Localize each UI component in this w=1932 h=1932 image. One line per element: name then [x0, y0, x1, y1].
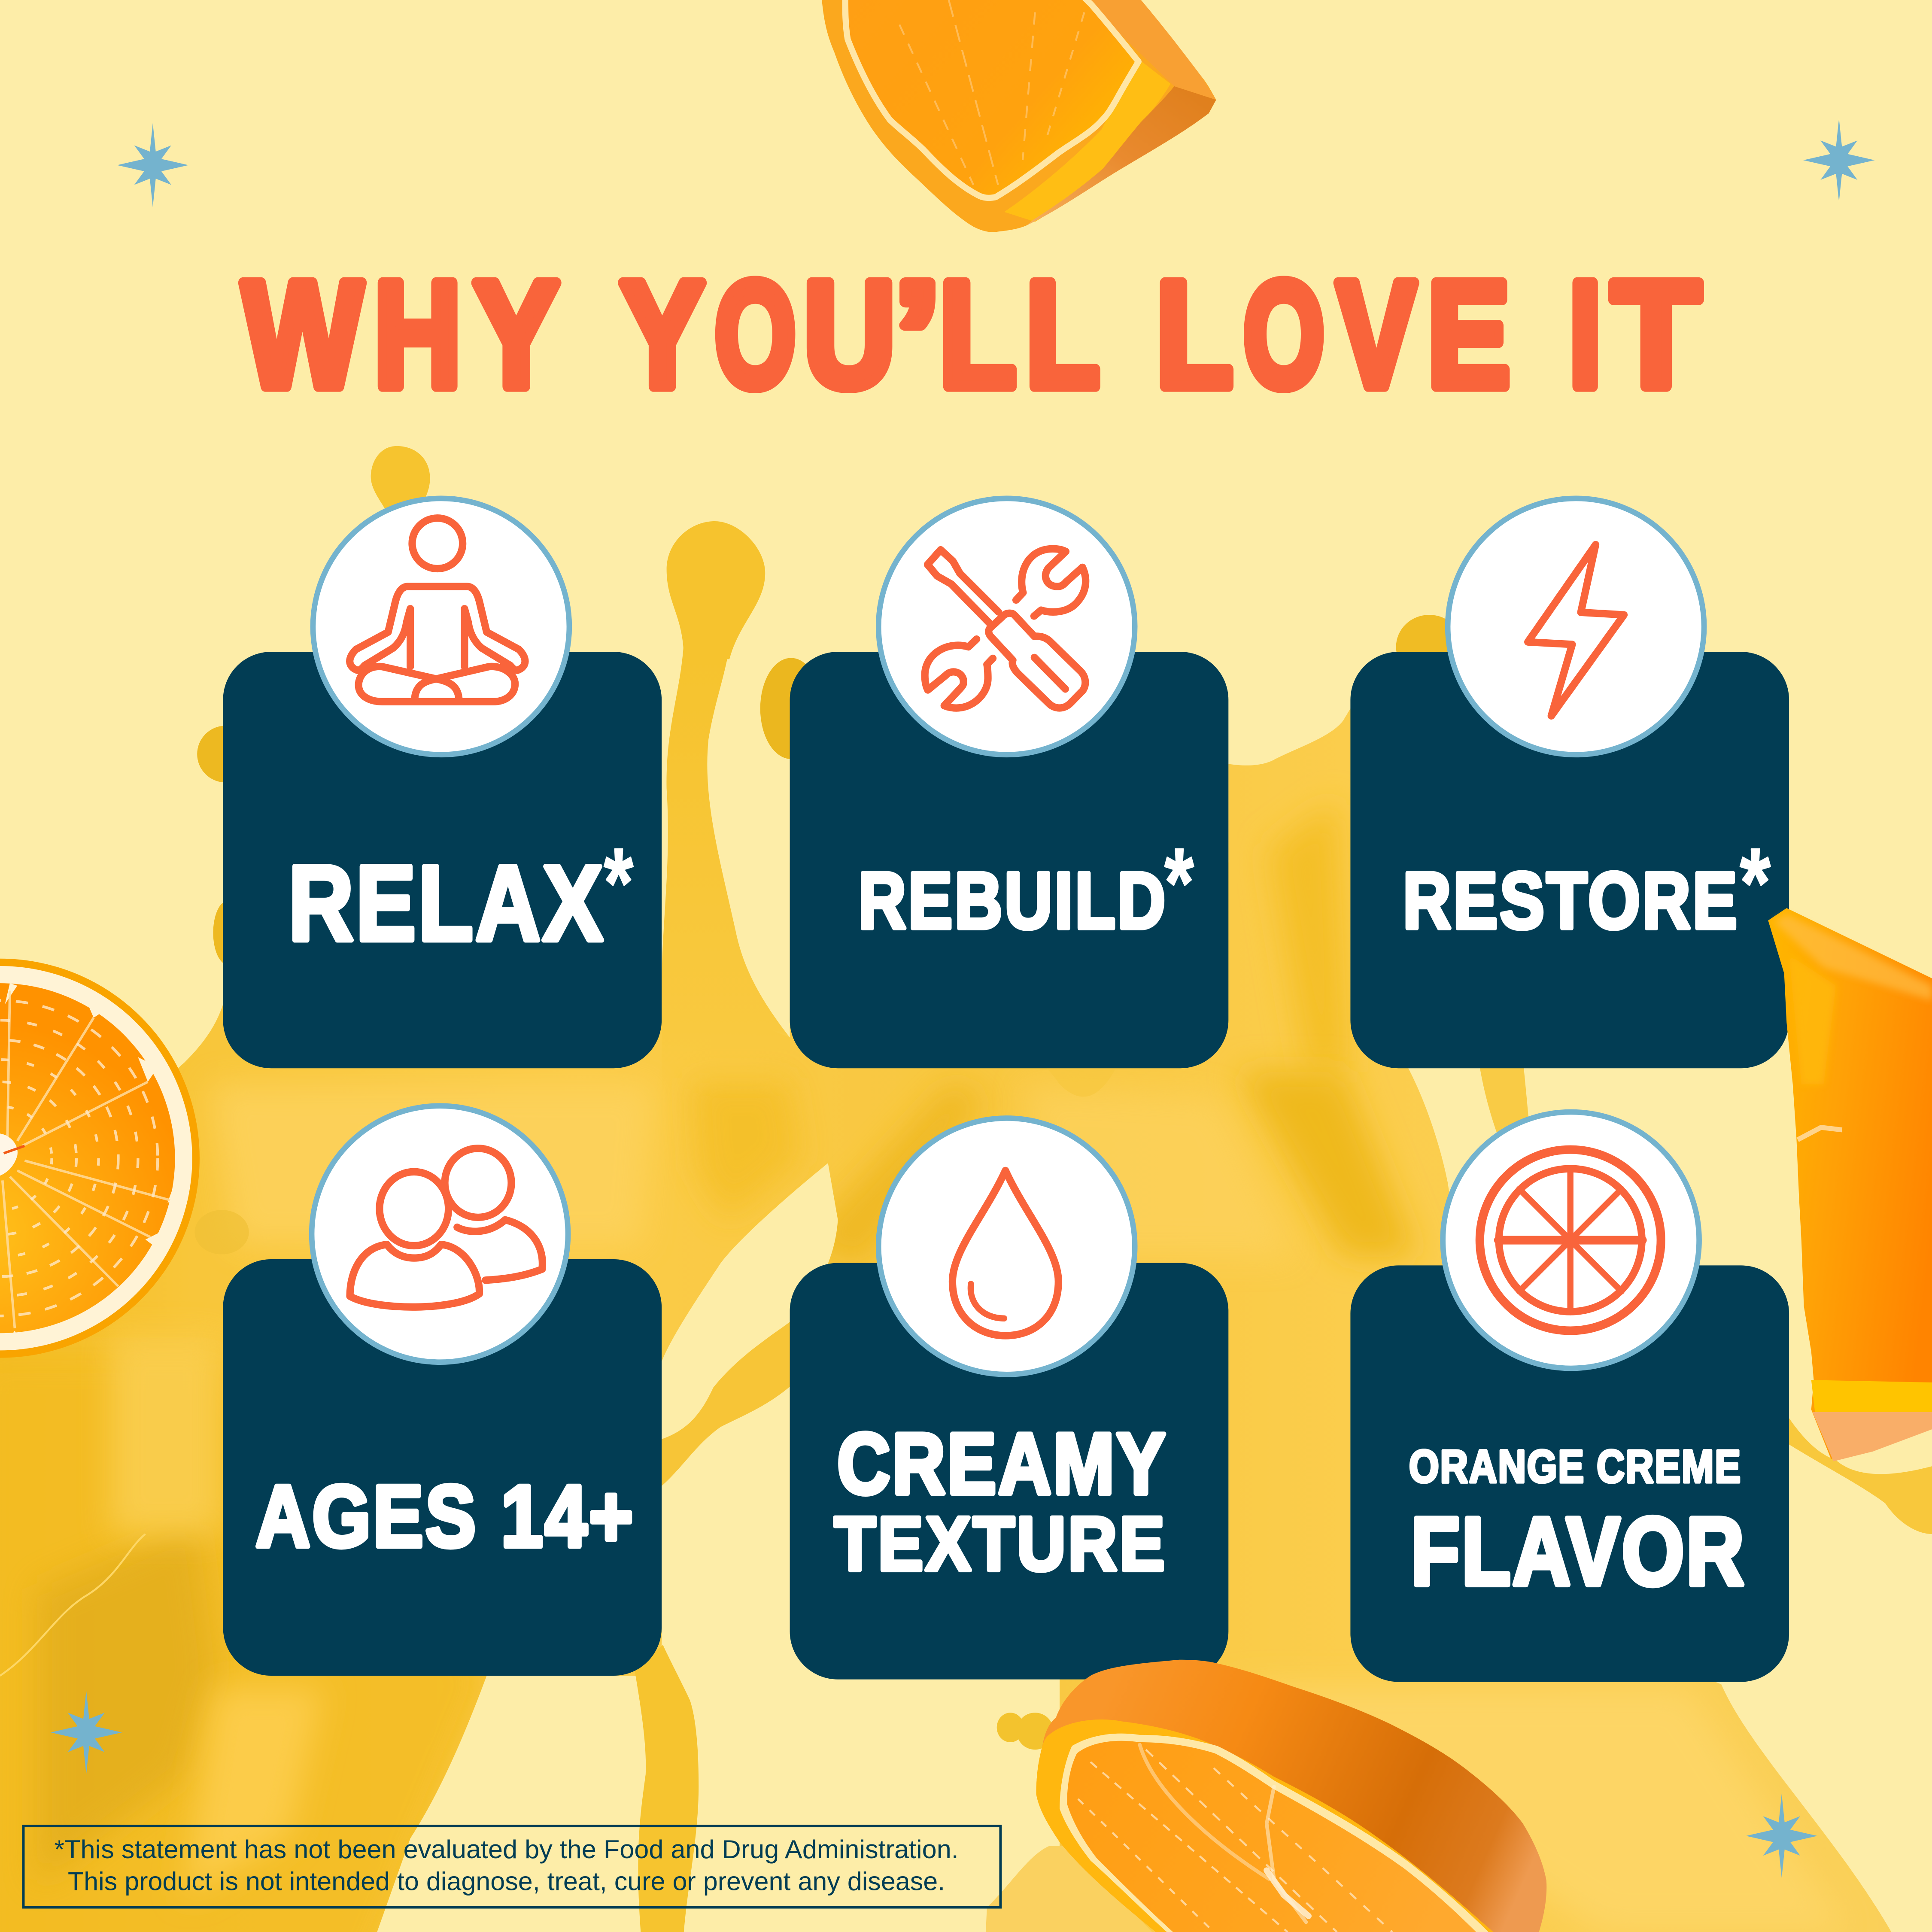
label: ages 14+: AGES 14+: [256, 1468, 635, 1565]
star: bottom right: [1746, 1794, 1817, 1878]
label: creamy texture: TEXTURE: [834, 1501, 1167, 1586]
column below ages card: [635, 1645, 699, 1932]
icon: meditation: [313, 498, 569, 755]
card: relax: [223, 652, 662, 1068]
label: orange creme flavor: ORANGE CREME: [1409, 1440, 1742, 1492]
star: bottom left: [51, 1691, 122, 1774]
label: restore: RESTORE: [1403, 856, 1739, 945]
label: restore: *: [1740, 827, 1771, 938]
title: U: [804, 251, 896, 419]
card: restore: [1350, 652, 1789, 1068]
drop: lower left of relax card: [213, 901, 243, 965]
title: Y: [620, 251, 704, 419]
strip right of flavor card: [1780, 1405, 1932, 1534]
label: relax: *: [604, 827, 634, 938]
orange: bottom half: [1036, 1660, 1546, 1932]
drop: large blob with stem: [667, 521, 765, 659]
card: ages: [223, 1259, 662, 1676]
label: relax: RELAX: [289, 843, 605, 963]
icon: energy bolt: [1448, 498, 1704, 755]
icon: people: [312, 1106, 568, 1362]
juice splash: [0, 446, 1932, 1932]
title: V: [1337, 251, 1416, 419]
splash strip between lower cards: [662, 1318, 795, 1486]
light wedge between cards: [662, 1163, 838, 1439]
icon: orange slice: [1443, 1112, 1699, 1368]
title: W: [243, 251, 363, 419]
title: E: [1428, 251, 1510, 419]
juice column between top cards: [662, 641, 790, 1097]
segments: [0, 983, 175, 1333]
title: H: [374, 251, 461, 419]
title: I: [1569, 251, 1601, 419]
title: T: [1612, 251, 1700, 419]
orange: left slice: [0, 959, 200, 1358]
disclaimer box: [24, 1826, 1000, 1908]
label: creamy texture: [834, 1415, 1167, 1586]
disclaimer box: *This statement has not been evaluated by the Food and Drug Administration.: [54, 1835, 959, 1864]
label: creamy texture: CREAMY: [837, 1415, 1167, 1512]
drops by bottom orange: [997, 1713, 1054, 1750]
disclaimer box: This product is not intended to diagnose, treat, cure or prevent any disease.: [68, 1866, 945, 1896]
label: orange creme flavor: [1409, 1440, 1746, 1605]
drop: top: [371, 446, 430, 524]
drop: left of relax card: [197, 726, 254, 782]
title: ’: [894, 251, 941, 419]
strip below restore card: [1479, 1060, 1530, 1140]
label: orange creme flavor: FLAVOR: [1411, 1498, 1746, 1605]
label: rebuild: *: [1164, 827, 1194, 938]
star: top right: [1803, 118, 1875, 202]
drop: left of restore card: [1396, 615, 1463, 679]
title: Y: [474, 251, 559, 419]
label: rebuild: REBUILD: [858, 856, 1167, 945]
title: L: [939, 251, 1016, 419]
orange: top wedge: [822, 0, 1216, 232]
icon: tools: [878, 498, 1135, 755]
icon: drop: [878, 1118, 1135, 1374]
title: O: [715, 251, 796, 419]
title: L: [1026, 251, 1100, 419]
card: creamy texture: [790, 1263, 1228, 1680]
card: rebuild: [790, 652, 1228, 1068]
star: top left: [117, 123, 188, 207]
drop: left of rebuild card: [760, 658, 822, 759]
card: orange creme flavor: [1350, 1265, 1789, 1682]
small hill near bottom orange: [986, 1846, 1152, 1932]
orange: right wedge: [1768, 908, 1932, 1461]
title: L: [1156, 251, 1233, 419]
title: O: [1243, 251, 1324, 419]
